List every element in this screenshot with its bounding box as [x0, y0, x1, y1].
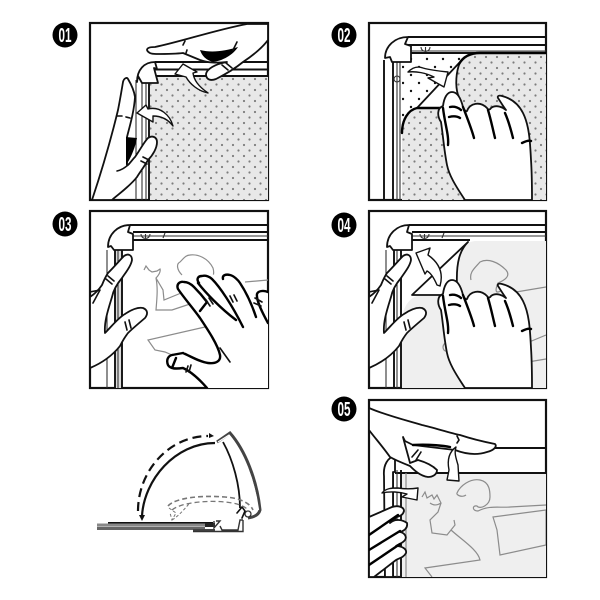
badge: step 05: [332, 396, 356, 422]
hand: pressing sheet: [438, 92, 532, 200]
panel: step 04: [369, 211, 546, 388]
frame corner piece: [387, 225, 412, 250]
panel: step 03: [90, 211, 268, 388]
hand shadow: left: [126, 137, 137, 165]
badge: step 02: 02: [338, 25, 350, 47]
screws: [394, 47, 430, 82]
poster and backing layers: [108, 522, 213, 524]
badge: step 05: 05: [338, 399, 350, 421]
panel: step 02: [369, 23, 546, 200]
grey sheet: [402, 53, 546, 200]
frame corner piece: [108, 225, 133, 250]
arrow: peel direction: [408, 67, 448, 87]
grey sheet: [400, 473, 546, 577]
closed clip dashed ghost: [168, 496, 253, 510]
hand: pressing sheet: [438, 280, 532, 388]
frame profile lines: [135, 80, 147, 200]
arrow: replace sheet: [416, 248, 441, 286]
exposed dotted backing: [402, 58, 460, 116]
poster figure outline: [443, 260, 546, 365]
badge: step 01: [52, 22, 78, 48]
grey sheet lower: [402, 296, 443, 388]
poster figure outline: [144, 255, 268, 355]
diagram: clip profile cross-section: [97, 433, 260, 532]
base profile: [193, 520, 243, 532]
dashed arc arrow: [138, 436, 208, 511]
frame profile lines: [107, 236, 268, 388]
arrow: top clip opening: [175, 64, 208, 93]
hand: right fingers fill: [182, 274, 268, 388]
hand: top holding frame: [147, 24, 268, 80]
frame profile lines: [386, 236, 546, 388]
hand: left pressing: [90, 255, 147, 368]
frame corner piece: [137, 62, 158, 83]
frame corner piece: [385, 37, 411, 62]
frame band: [116, 251, 122, 388]
badge: step 01: 01: [58, 25, 72, 47]
open clip profile: [217, 433, 260, 518]
panel: step 01: [90, 23, 268, 200]
screw mark: [141, 233, 165, 239]
badge: step 02: [332, 22, 356, 48]
hand: left holding frame: [92, 78, 157, 200]
badge: step 04: [332, 212, 356, 238]
arrow: close top profile: [447, 447, 459, 481]
badge: step 03: 03: [58, 214, 72, 236]
hand shadow: top: [200, 47, 238, 62]
arrow: close left profile: [382, 488, 418, 500]
screw mark: [420, 233, 444, 239]
panel: step 05: [369, 400, 546, 577]
hand: top pressing: [369, 408, 496, 477]
peeled sheet corner: [417, 62, 460, 108]
frame profile lines: [396, 470, 398, 577]
frame corner piece: [384, 456, 395, 577]
solid arc arrow: [142, 443, 215, 516]
grey sheet upper: [443, 241, 546, 388]
frame profile lines: [397, 51, 546, 200]
hand: left pressing: [369, 255, 426, 368]
badge: step 03: [52, 212, 78, 236]
badge: step 04: 04: [338, 215, 351, 237]
arrow: left clip opening: [137, 105, 173, 126]
peeled sheet corner: [412, 242, 468, 295]
hand: right fingers: [167, 275, 268, 388]
poster figure outline: [422, 480, 546, 577]
hand: fingers bottom left: [369, 506, 407, 577]
dotted backing sheet: [150, 77, 268, 200]
